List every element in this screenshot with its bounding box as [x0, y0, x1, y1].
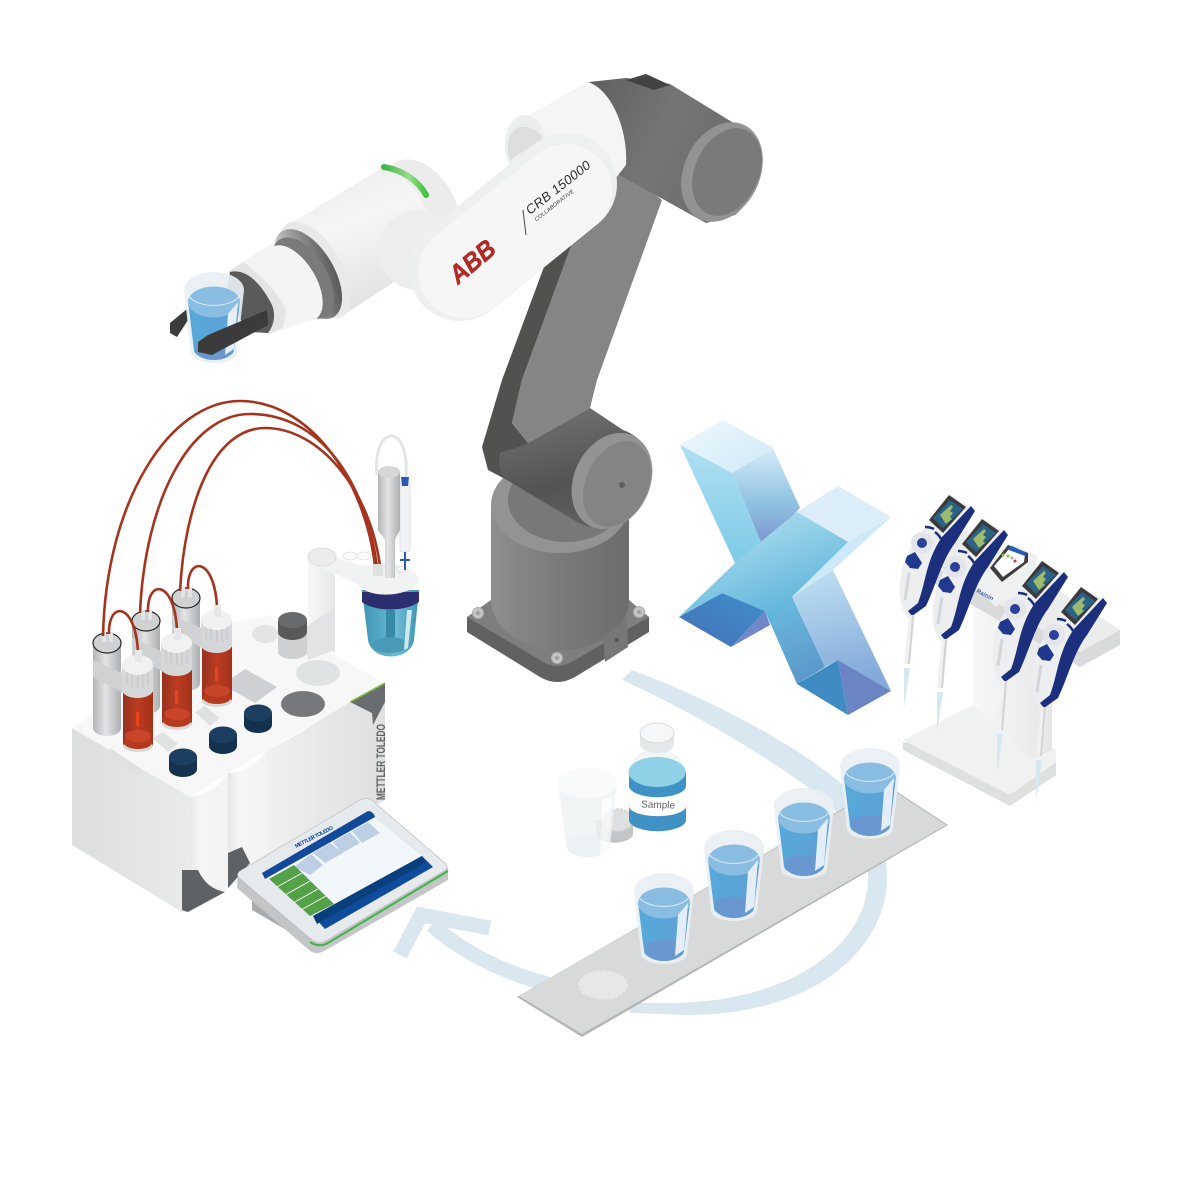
terminal: header bar: [262, 811, 375, 879]
titrator: main module side: [267, 683, 385, 865]
cup 1: [634, 873, 694, 964]
X: right thin side: [792, 517, 891, 597]
titrator: small slot 2: [153, 732, 178, 752]
pipette 2: [933, 519, 1008, 732]
robot: elbow joint: [499, 408, 651, 527]
titrator: module 1 foot: [182, 870, 225, 912]
robot: wrist end rim: [264, 210, 366, 330]
robot: arm link pill: [460, 184, 566, 272]
sample strip: [517, 784, 948, 1037]
robot: base flange: [467, 600, 649, 682]
titrator: stand top: [308, 548, 336, 566]
titrator: stand foot: [300, 608, 335, 660]
titrator: disc dark: [281, 691, 325, 717]
titrator: tubing loop: [377, 436, 406, 478]
robot: shoulder housing: [589, 78, 759, 223]
terminal: green trim: [310, 871, 448, 945]
titrator: navy cap 3: [244, 704, 272, 733]
terminal: light tiles: [294, 822, 380, 875]
X: lower right outer side: [792, 570, 891, 691]
pipette 4: [1032, 587, 1107, 800]
terminal: green keys: [269, 865, 334, 916]
X: crossing band: [679, 512, 848, 623]
X: upper right arm top: [797, 486, 891, 542]
titrator: stand column: [308, 558, 335, 653]
robot: cylinder top ring: [491, 457, 629, 553]
titrator: unit 1: [93, 611, 153, 752]
robot: lower arm dark side: [482, 230, 577, 480]
bottle label: Sample: [641, 799, 676, 812]
rack: brand label: Rainin: [975, 588, 994, 603]
titrator: tray slot: [232, 669, 277, 703]
robot: ABB logo: ABB: [442, 233, 502, 290]
robot: held cup: [184, 272, 244, 363]
titrator: unit 3: [172, 566, 232, 707]
titrator: small disc: [252, 625, 278, 643]
rack: base plate: [903, 705, 1056, 806]
robot: shoulder cap: [626, 74, 670, 90]
robot: lower arm face: [512, 165, 662, 443]
robot: elbow round joint: [378, 210, 458, 290]
titrator: navy cap 1: [169, 748, 197, 777]
X: upper arm left side: [680, 445, 763, 563]
robot: LED status ring: [384, 167, 426, 195]
terminal: bezel: [238, 798, 447, 943]
rack: head unit: [972, 543, 1037, 607]
robot: divider line: [523, 210, 526, 235]
X: lower right end right: [838, 660, 891, 715]
robot: gripper base: [225, 271, 274, 333]
robot: model label: CRB 150000: [523, 157, 594, 217]
terminal: brand: METTLER TOLEDO: [294, 825, 335, 850]
titrator: long tube 3: [180, 428, 380, 591]
X: lower right end left: [797, 660, 848, 715]
robot: wrist body: [288, 168, 440, 320]
titrator: [72, 401, 419, 912]
terminal: screen: [265, 817, 422, 917]
titrator: electrode: [378, 466, 400, 578]
titrator: tube connectors: [373, 564, 383, 576]
titrator: module 2 foot: [228, 847, 250, 888]
titrator: module 1 front: [188, 773, 228, 912]
cup 2: [704, 830, 764, 921]
X: lower left underside: [731, 611, 770, 647]
titrator: clip: [110, 748, 140, 775]
robot arm: [170, 74, 778, 682]
X: lower right inner side: [765, 597, 825, 684]
titrator: disc light: [296, 660, 340, 686]
rack: column: [973, 590, 1052, 760]
sample bottle: [628, 723, 686, 831]
robot: rear finger: [170, 309, 188, 337]
pipette 1: [900, 495, 975, 708]
titrator: unit 2: [132, 589, 192, 730]
titrator: long tube 1: [103, 401, 375, 636]
pipette 3: [993, 561, 1068, 774]
robot: cable bracket: [603, 618, 628, 662]
robot: metal ring: [259, 218, 356, 330]
terminal: side: [237, 868, 448, 953]
titrator: left face: [72, 728, 190, 912]
terminal: stand: [252, 900, 300, 935]
X: upper arm right side: [732, 448, 800, 547]
robot: wrist flange: [368, 146, 476, 264]
titrator: side panel: [350, 683, 385, 725]
titrator: module 2 front: [228, 750, 267, 888]
titrator: beaker: [362, 590, 419, 656]
blue letter X: [679, 420, 891, 715]
rack: display: [990, 545, 1028, 582]
robot: front finger: [198, 310, 268, 355]
touchscreen terminal: [237, 798, 448, 953]
arrow: circular workflow arrow: [400, 670, 887, 1015]
robot: elbow face: [556, 420, 668, 542]
titrator: side green trim: [350, 683, 385, 702]
robot: tool section: [228, 236, 334, 335]
X: lower left bottom: [679, 593, 765, 647]
empty cup: [557, 768, 617, 858]
cup 4: [840, 748, 900, 839]
robot: shoulder face: [666, 109, 778, 235]
gear cap: [596, 809, 633, 843]
titrator: grey bottle: [278, 612, 307, 659]
cup 3: [774, 788, 834, 879]
X: top face: [680, 420, 773, 473]
titrator: brand text: METTLER TOLEDO: [376, 724, 388, 800]
rack: cross bar: [932, 530, 1120, 667]
robot: tool rim: [228, 262, 286, 335]
pipette rack: [900, 495, 1120, 806]
robot: base cylinder: [491, 505, 629, 650]
robot: model label: COLLABORATIVE: [534, 189, 576, 223]
titrator: top surface: [72, 615, 385, 797]
terminal: bottom band: [313, 856, 433, 929]
titrator: small slot 1: [195, 706, 220, 726]
titrator: stand arm: [308, 549, 419, 595]
titrator: navy cap 2: [209, 726, 237, 754]
titrator: arm holes: [343, 552, 407, 572]
terminal: bottom band shade: [313, 856, 425, 924]
titrator: sensor: [400, 477, 410, 570]
robot: upper arm rear link: [505, 82, 626, 250]
titrator: long tube 2: [140, 414, 377, 613]
